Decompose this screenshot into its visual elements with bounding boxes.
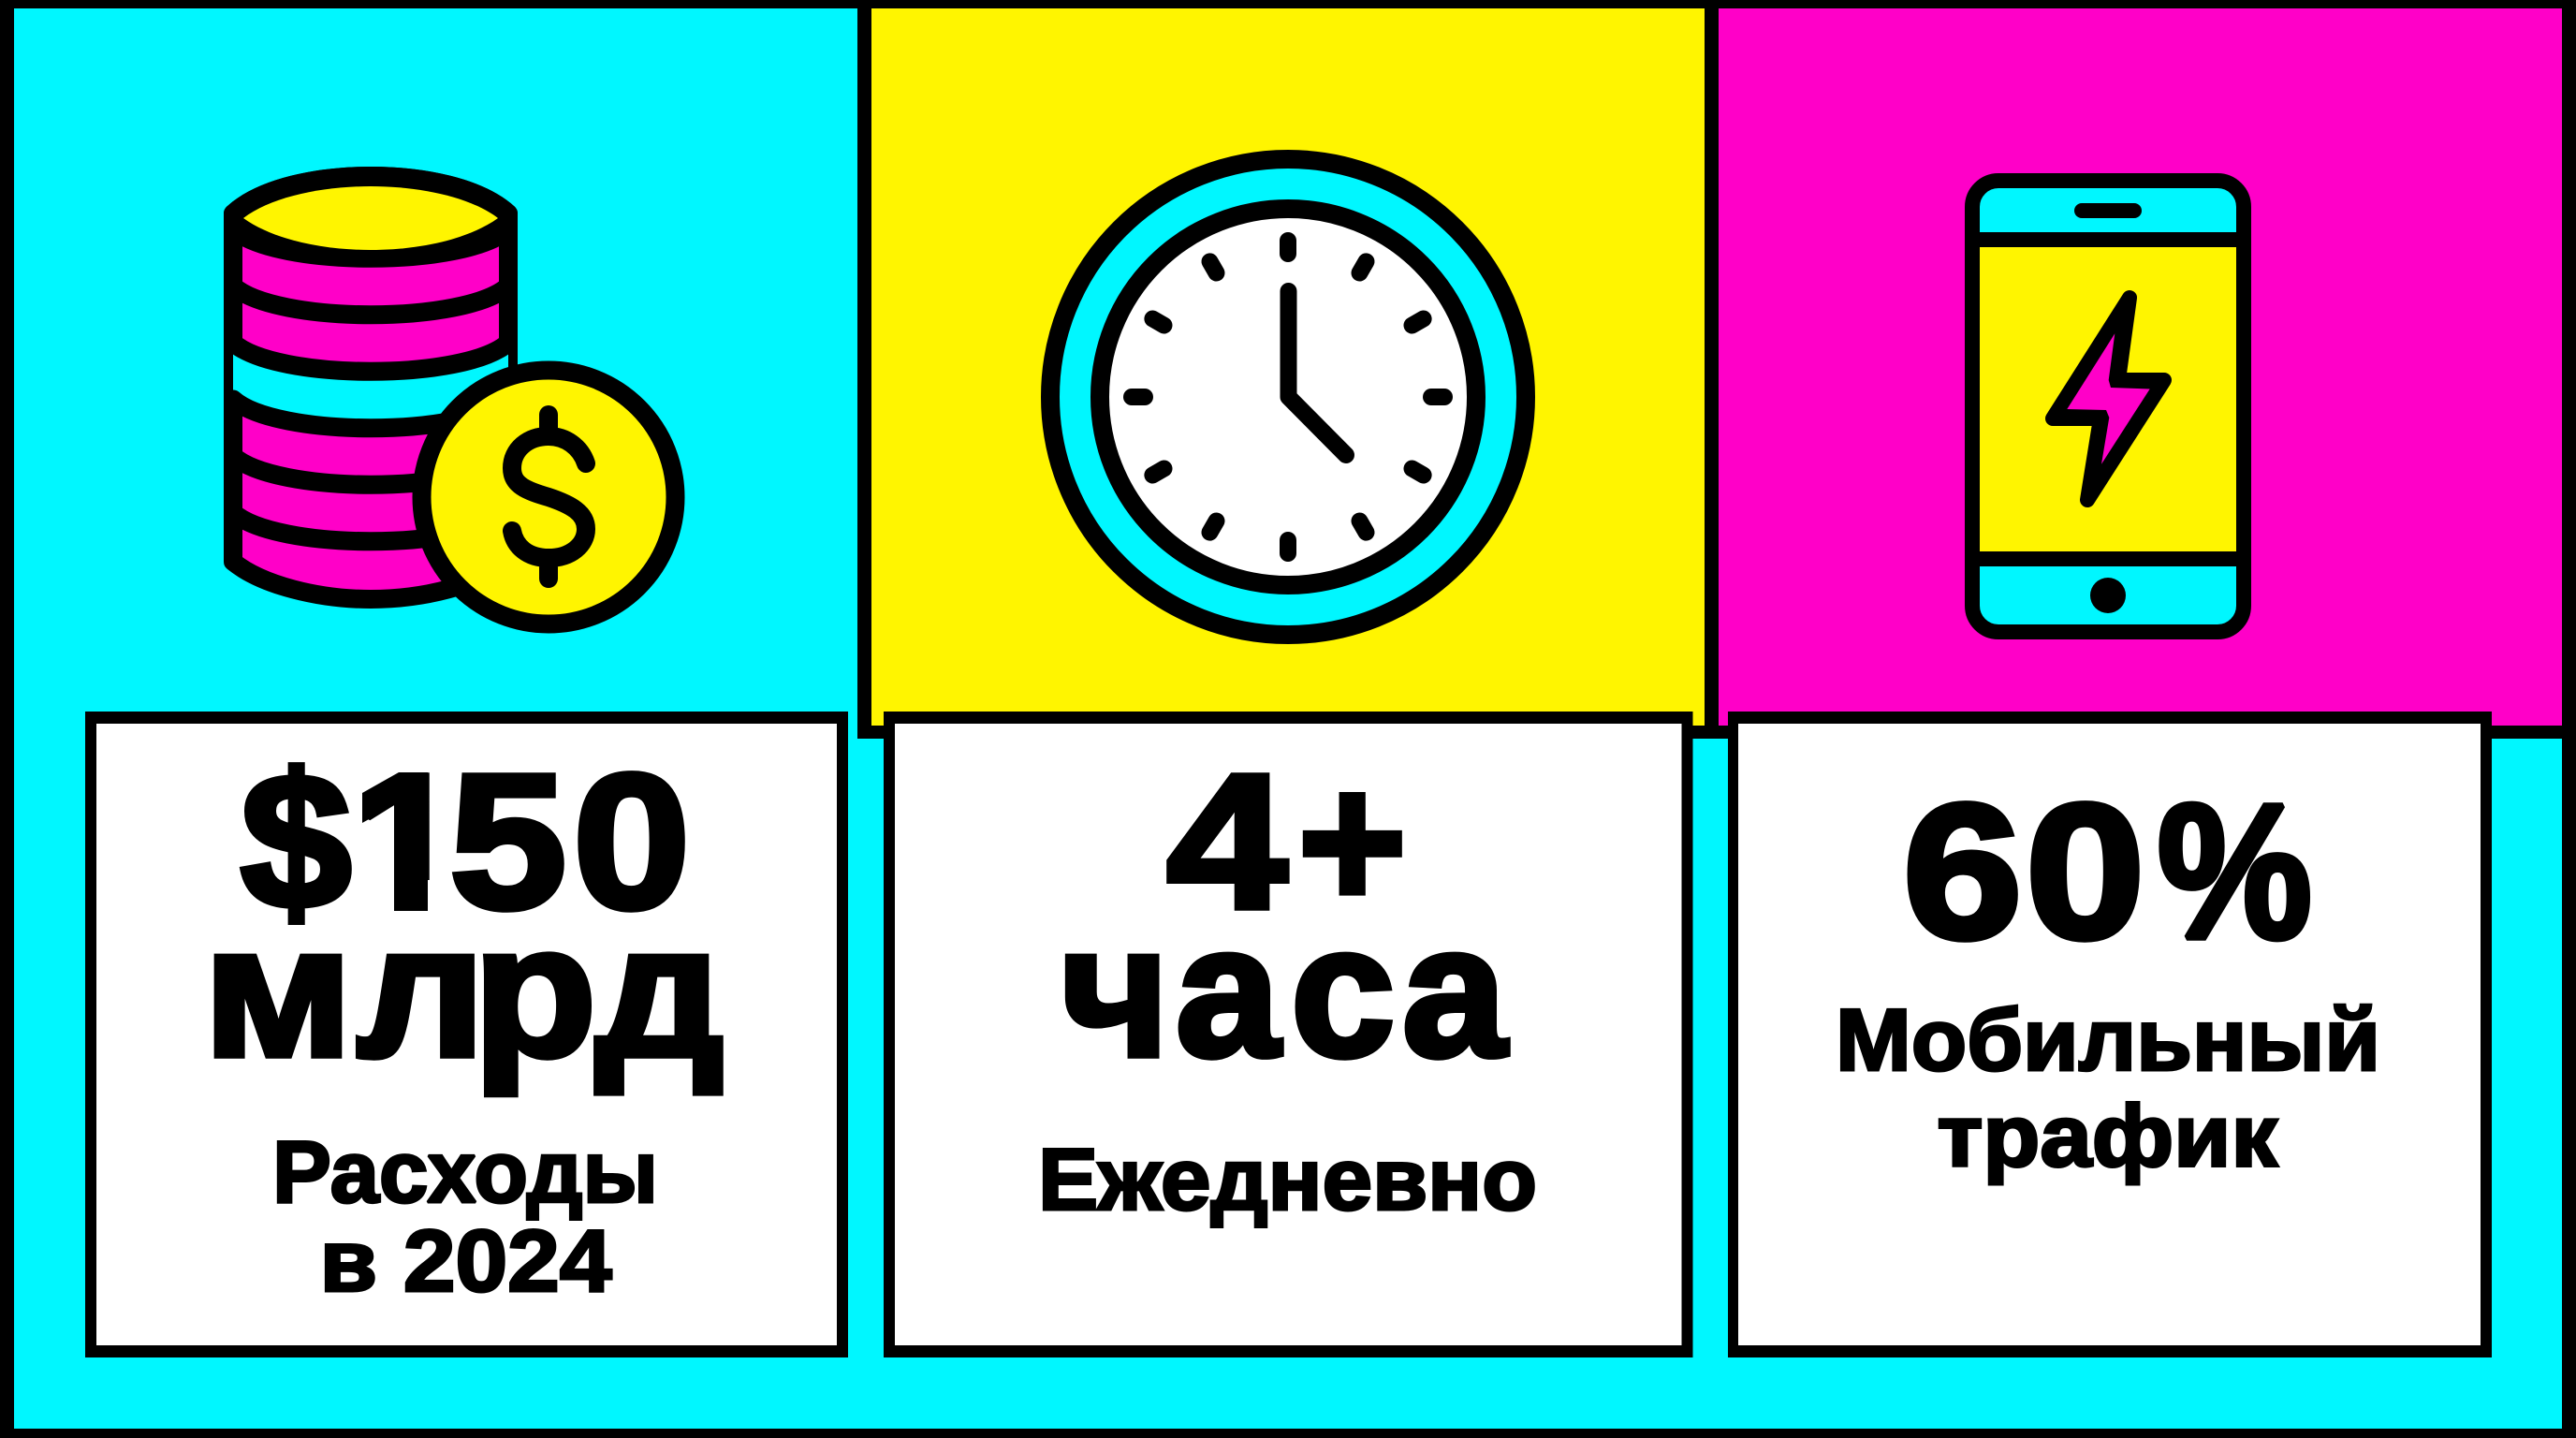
panel: magenta — [1705, 0, 2576, 739]
stat value: $150 млрд: 1 — [356, 734, 462, 949]
panel: time stat — [884, 712, 1692, 1357]
stat value: $150 млрд: млрд — [203, 888, 724, 1096]
stat label: Мобильный трафик: Мобильный — [1836, 990, 2380, 1089]
stat value: 60%: 60 — [1903, 765, 2145, 979]
stat value: 60%: % — [2158, 765, 2312, 978]
stat value: $150 млрд: 50 — [449, 734, 690, 948]
icon: phone with lightning — [1972, 181, 2244, 632]
stat value: 60% — [1903, 765, 2312, 979]
icon: dollar coin — [421, 371, 676, 624]
stat label: Мобильный трафик: трафик — [1938, 1086, 2278, 1185]
panel: spending stat — [85, 712, 848, 1357]
stat label: Мобильный трафик — [1836, 990, 2380, 1185]
stat value: $150 млрд: $ — [241, 735, 351, 949]
stat value: 4+ часа: 4 — [1166, 735, 1287, 949]
panel: yellow — [857, 0, 1719, 739]
stat value: $150 млрд — [203, 734, 724, 1096]
stat label: Расходы в 2024: в 2024 — [320, 1211, 612, 1310]
stat label: Расходы в 2024 — [272, 1123, 658, 1310]
icon: coin stack — [233, 176, 676, 624]
icon: clock — [1050, 159, 1526, 635]
stat value: 4+ часа — [1061, 734, 1508, 1095]
stat value: 4+ часа: часа — [1061, 888, 1508, 1095]
stat label: Расходы в 2024: Расходы — [272, 1123, 658, 1221]
stat label: Ежедневно: Ежедневно — [1038, 1130, 1537, 1228]
stat value: 4+ часа: + — [1298, 734, 1407, 948]
panel: mobile traffic stat — [1728, 712, 2492, 1357]
